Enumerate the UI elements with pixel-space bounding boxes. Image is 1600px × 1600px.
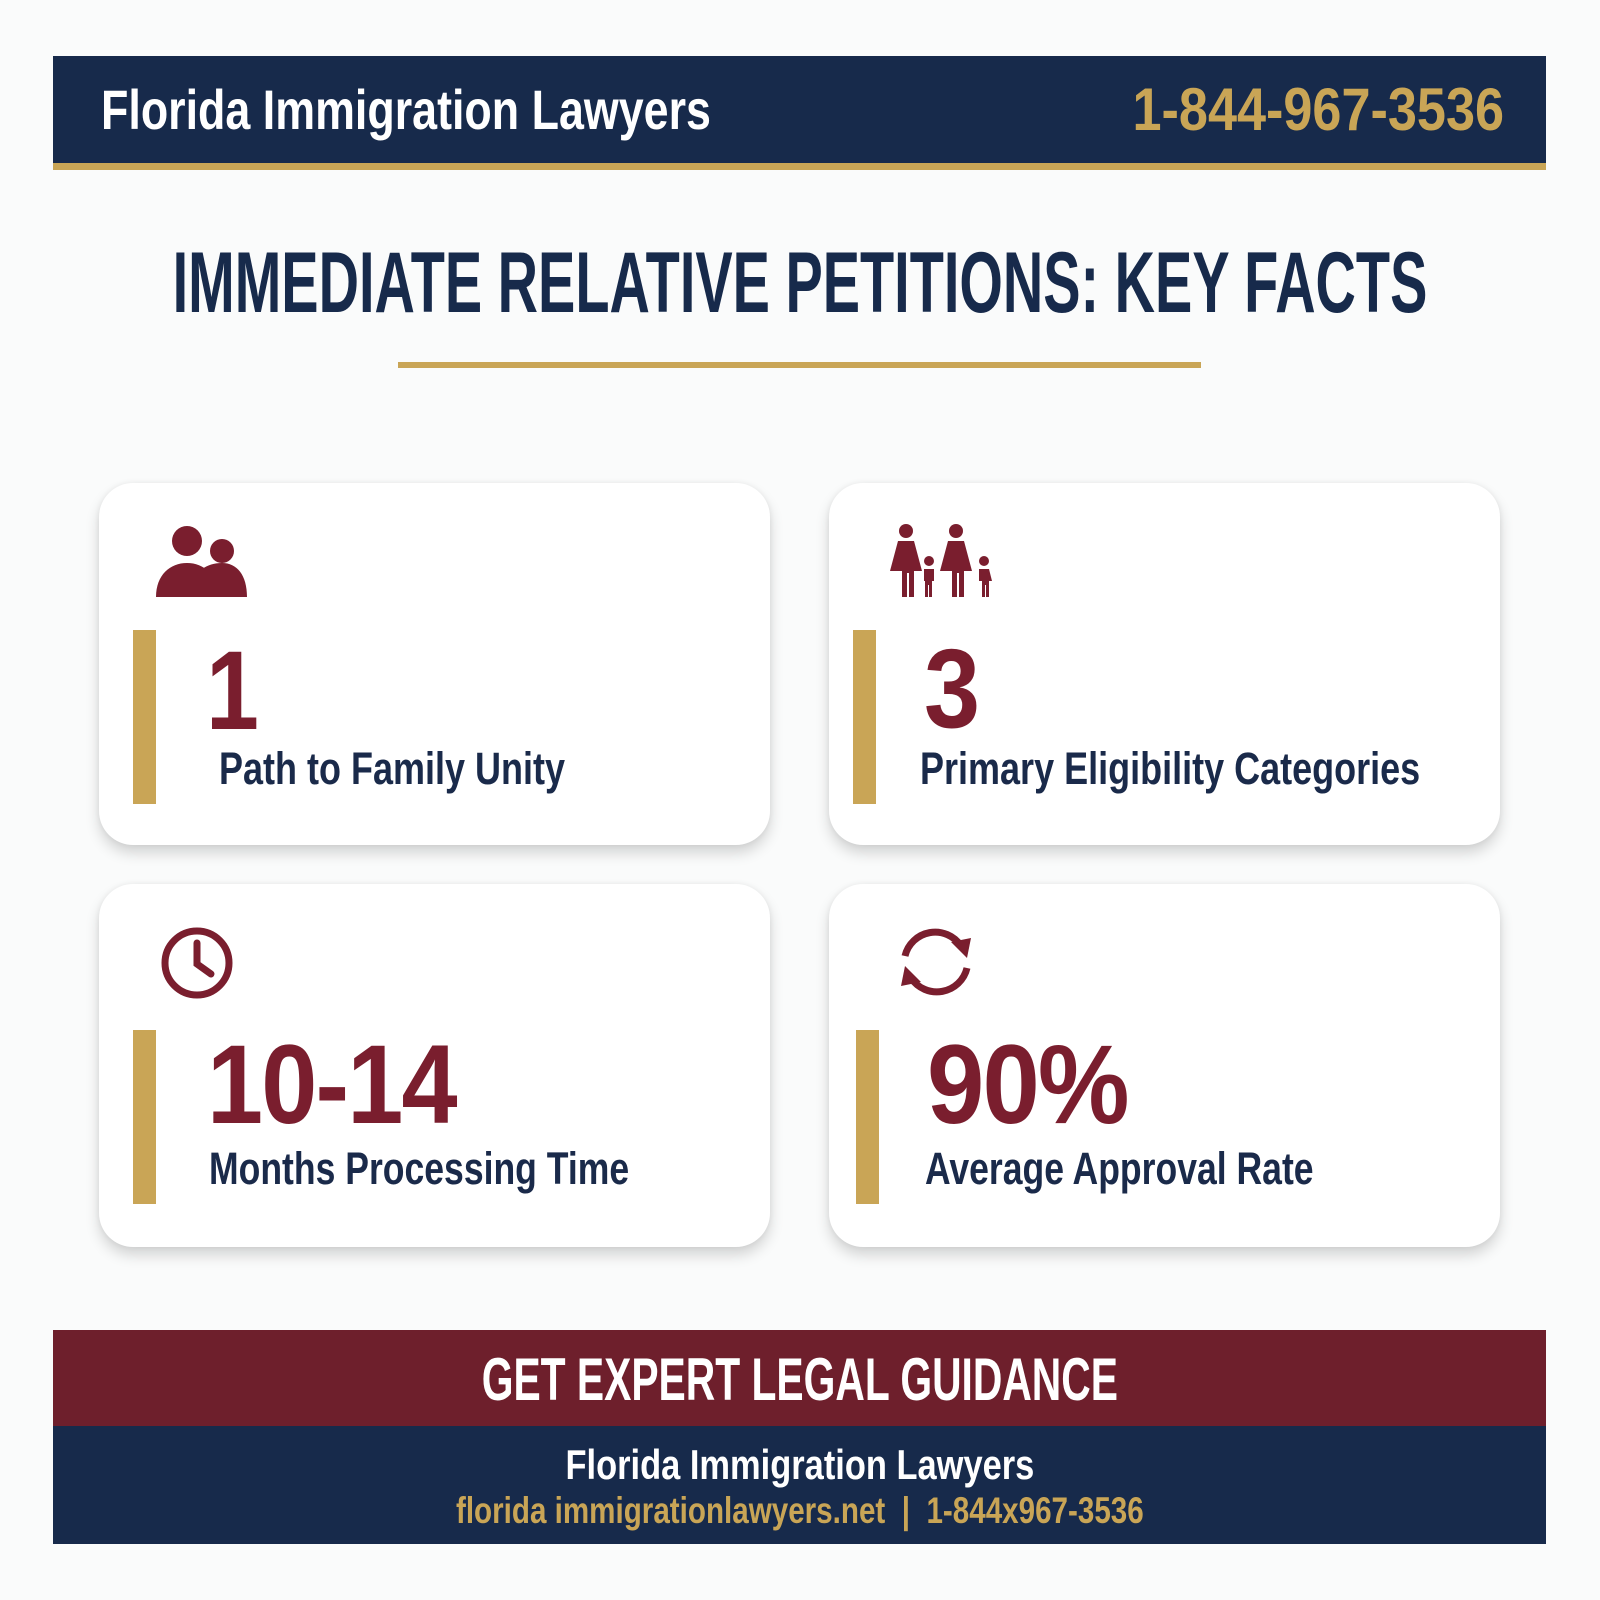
header firm name: Florida Immigration Lawyers (101, 78, 711, 141)
icon: family (890, 524, 992, 597)
stat label: Average Approval Rate (925, 1143, 1314, 1194)
title underline (398, 362, 1201, 368)
icon: people (156, 526, 247, 597)
stat number: 3 (924, 626, 978, 751)
footer contact line: florida immigrationlawyers.net | 1-844x967-3536 (456, 1490, 1143, 1531)
stat number: 10-14 (207, 1022, 456, 1147)
icon: clock (162, 928, 232, 998)
stat label: Months Processing Time (209, 1143, 629, 1194)
card: processing time (99, 884, 770, 1247)
card: eligibility categories (829, 483, 1500, 845)
stat number: 1 (206, 628, 257, 753)
card: approval rate (829, 884, 1500, 1247)
stat number: 90% (927, 1022, 1128, 1147)
stat label: Path to Family Unity (219, 743, 565, 794)
stat label: Primary Eligibility Categories (920, 743, 1420, 794)
icon: refresh (901, 928, 971, 996)
CTA text: GET EXPERT LEGAL GUIDANCE (481, 1346, 1118, 1413)
footer firm name: Florida Immigration Lawyers (565, 1441, 1034, 1488)
footer CTA banner (53, 1330, 1546, 1426)
card: family unity (99, 483, 770, 845)
footer contact panel (53, 1426, 1546, 1544)
header bar (53, 56, 1546, 170)
title: IMMEDIATE RELATIVE PETITIONS: KEY FACTS (173, 235, 1427, 331)
header phone: 1-844-967-3536 (1132, 76, 1504, 143)
